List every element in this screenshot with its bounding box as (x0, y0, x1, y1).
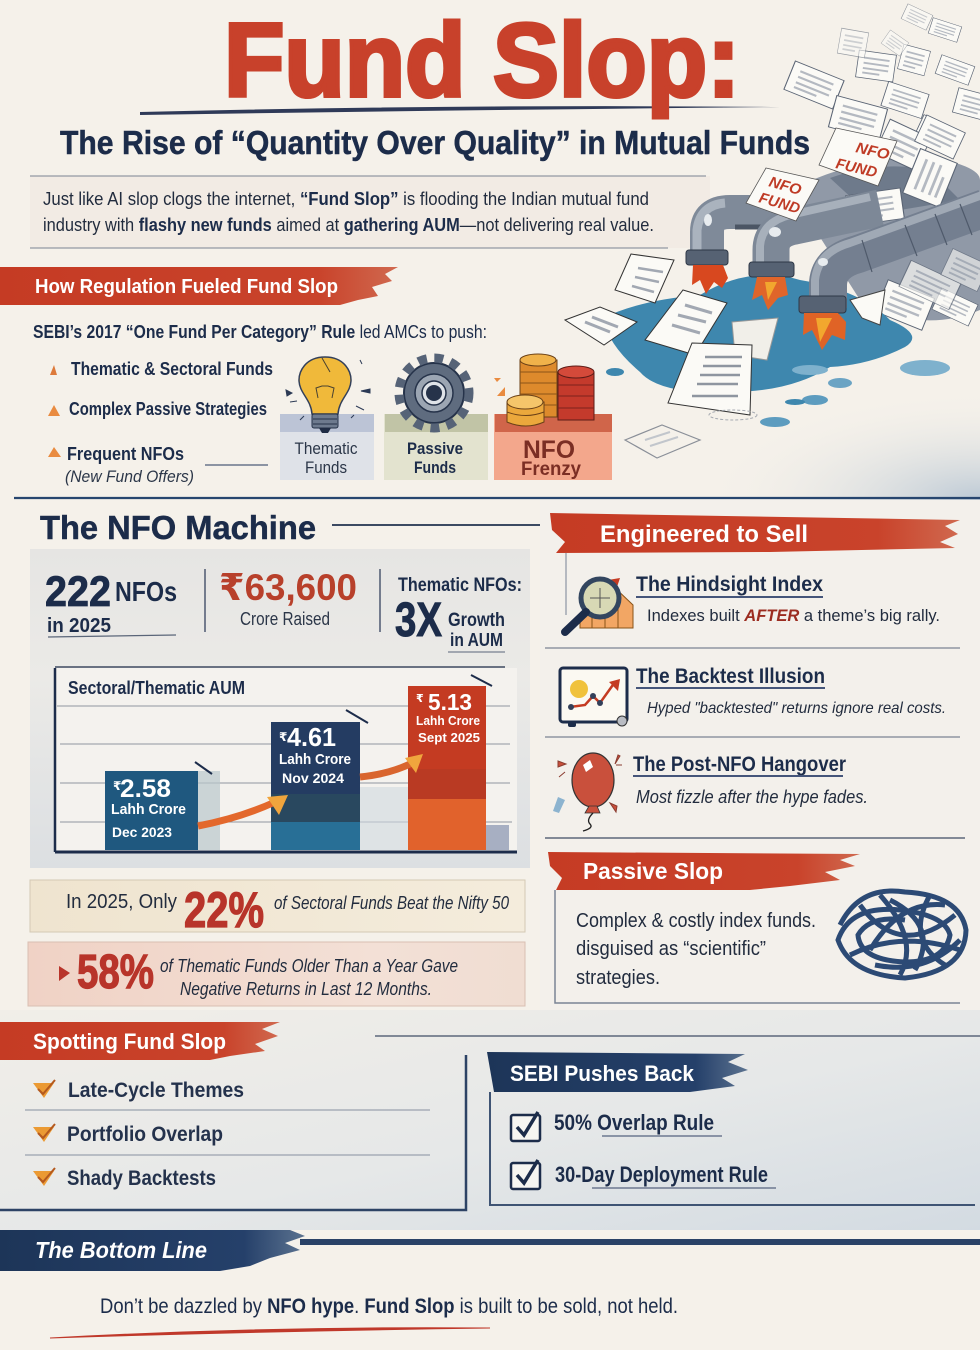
bar: Nov 2024: Nov 2024 (282, 770, 344, 786)
banner: How Regulation Fueled Fund Slop: How Regulation Fueled Fund Slop (35, 276, 338, 298)
box: Thematic Funds (280, 414, 374, 480)
bullet list: Complex Passive Strategies (69, 399, 267, 419)
heading: The NFO Machine: The NFO Machine (40, 509, 316, 546)
item: The Post-NFO Hangover (553, 753, 868, 831)
bullet list: Thematic & Sectoral Funds (71, 359, 273, 379)
arrow: 2023 to 2024 (198, 795, 288, 826)
banner: Engineered to Sell (550, 513, 960, 553)
bar: Nov 2024 (271, 710, 368, 850)
NFO FUND card (819, 128, 897, 186)
foreground papers (565, 254, 885, 458)
item: The Backtest Illusion: The Backtest Illusion (636, 665, 825, 688)
stat: thematic NFOs 3X: Thematic NFOs: (398, 575, 522, 596)
rule: 30-Day Deployment (511, 1160, 776, 1189)
divider (14, 497, 980, 499)
panel: NFO stats (30, 549, 530, 868)
bar: Nov 2024: ₹ (279, 730, 287, 744)
NFO FUND card (746, 168, 819, 221)
bar: Sept 2025 (408, 675, 492, 850)
heap of paper (790, 155, 980, 320)
banner: Passive Slop (548, 852, 860, 890)
icon: magnifying glass over chart (565, 578, 633, 632)
NFO FUND card: FUND (757, 190, 802, 217)
flying papers (784, 4, 980, 155)
box: Passive Funds (384, 414, 488, 480)
panel: Passive Slop: strategies. (576, 967, 660, 989)
illustration: pipes flooding paper (565, 4, 980, 458)
callout: 58 percent (28, 942, 525, 1006)
bar: Nov 2024: 4.61 (287, 722, 336, 752)
item: The Post-NFO Hangover: Most fizzle after the hype fades. (636, 787, 868, 807)
panel: Spotting Fund Slop (0, 1022, 980, 1210)
stat: rupee 63,600: Crore Raised (240, 609, 330, 629)
list item: Portfolio Overlap: Portfolio Overlap (67, 1123, 223, 1146)
bar: Dec 2023: ₹ (113, 779, 121, 793)
box: Passive Funds: Passive (407, 439, 463, 458)
stat: 222 NFOs: in 2025 (47, 615, 111, 637)
bar: Sept 2025: Lahh Crore (416, 713, 480, 728)
box: Passive Funds: Funds (414, 458, 456, 477)
banner: The Bottom Line: The Bottom Line (35, 1237, 207, 1263)
panel: Passive Slop: Complex & costly index funds. (576, 910, 816, 932)
bar: Sept 2025: 5.13 (428, 689, 472, 715)
item: The Hindsight Index: Indexes built AFTER a theme’s big rally. (647, 606, 940, 625)
bar: Nov 2024: Lahh Crore (279, 751, 351, 768)
box: NFO Frenzy: Frenzy (521, 459, 581, 480)
bar: Sept 2025: ₹ (416, 693, 424, 705)
item: The Post-NFO Hangover: The Post-NFO Hangover (633, 753, 846, 776)
stat: thematic NFOs 3X: 3X (395, 594, 442, 647)
box: Thematic Funds: Thematic (294, 439, 358, 458)
stat: rupee 63,600 (219, 567, 357, 629)
callout: 22 percent (30, 880, 525, 938)
item: The Hindsight Index (565, 573, 940, 632)
icon: balloon (553, 753, 622, 831)
icon: coin stacks (494, 354, 594, 426)
bar: Sept 2025: Sept 2025 (418, 730, 480, 745)
box: Thematic Funds: Funds (305, 458, 347, 477)
banner: Engineered to Sell: Engineered to Sell (600, 521, 808, 548)
callout: 22 percent: 22% (184, 882, 264, 938)
subtitle: The Rise of “Quantity Over Quality” in Mutual Funds (60, 124, 810, 161)
icon: gear (399, 358, 469, 428)
callout: 58 percent: of Thematic Funds Older Than a Year Gave (160, 956, 458, 976)
callout: 58 percent: 58% (77, 946, 154, 999)
list item: Shady Backtests: Shady Backtests (67, 1167, 216, 1190)
NFO FUND card: NFO (767, 174, 804, 199)
panel: Spotting Fund Slop: Spotting Fund Slop (33, 1029, 226, 1054)
panel: SEBI Pushes Back: SEBI Pushes Back (510, 1061, 695, 1086)
icon: tangled scribble (838, 891, 966, 978)
stat: 222 NFOs: NFOs (115, 576, 177, 607)
intro paragraph: Just like AI slop clogs the internet, “Fund Slop” is flooding the Indian mutual fund (43, 189, 649, 209)
chart title: Sectoral/Thematic AUM (68, 678, 245, 698)
callout: 22 percent: of Sectoral Funds Beat the Nifty 50 (274, 893, 509, 913)
panel: Passive Slop (555, 890, 966, 1003)
banner: How Regulation Fueled Fund Slop (0, 267, 398, 305)
bar: Dec 2023 (105, 762, 212, 850)
stat: 222 NFOs: 222 (45, 568, 111, 616)
panel: Passive Slop: disguised as “scientific” (576, 938, 766, 960)
conclusion text: Don’t be dazzled by NFO hype. Fund Slop is built to be sold, not held. (100, 1295, 678, 1318)
box: NFO Frenzy (494, 414, 612, 480)
rule: 50% Overlap: 50% Overlap Rule (554, 1110, 714, 1135)
conclusion text (50, 1295, 678, 1338)
red flames (692, 265, 728, 294)
bar: Dec 2023: Lahh Crore (111, 801, 186, 818)
rule: 30-Day Deployment: 30-Day Deployment Rule (555, 1162, 768, 1187)
bar: Dec 2023: Dec 2023 (112, 824, 172, 840)
item: The Hindsight Index: The Hindsight Index (636, 573, 823, 596)
sebi rule line: SEBI’s 2017 “One Fund Per Category” Rule led AMCs to push: (33, 322, 487, 342)
icon: light bulb (286, 357, 370, 433)
stat: thematic NFOs 3X (395, 575, 522, 652)
intro paragraph: industry with flashy new funds aimed at gathering AUM—not delivering real value. (43, 215, 654, 235)
callout: 58 percent: Negative Returns in Last 12 Months. (180, 979, 432, 999)
bar: Dec 2023: 2.58 (120, 775, 171, 803)
box: NFO Frenzy: NFO (523, 436, 575, 464)
stat: rupee 63,600: ₹63,600 (219, 567, 357, 608)
stat: thematic NFOs 3X: in AUM (450, 630, 503, 650)
arrow: 2024 to 2025 (360, 754, 423, 777)
pipes (707, 212, 780, 258)
banner: The Bottom Line (0, 1230, 980, 1271)
stat: 222 NFOs (45, 568, 177, 637)
intro paragraph (30, 176, 710, 248)
title: Fund Slop: (224, 3, 740, 119)
bullet list: Frequent NFOs (67, 444, 184, 464)
callout: 22 percent: In 2025, Only (66, 891, 177, 913)
list item: Late-Cycle Themes: Late-Cycle Themes (68, 1079, 244, 1102)
item: The Backtest Illusion: Hyped "backtested" returns ignore real costs. (647, 700, 946, 717)
banner: Passive Slop: Passive Slop (583, 858, 723, 884)
bullet list: (New Fund Offers) (65, 467, 194, 486)
stat: thematic NFOs 3X: Growth (448, 610, 505, 631)
bullet list (48, 359, 273, 486)
NFO FUND card: NFO (854, 139, 891, 164)
bar chart: Sectoral/Thematic AUM (55, 667, 517, 852)
NFO FUND card: FUND (834, 155, 879, 181)
puddle (603, 275, 912, 392)
item: The Backtest Illusion (560, 665, 946, 727)
rule: 50% Overlap (511, 1110, 722, 1141)
icon: backtest screen (560, 668, 627, 727)
panel: SEBI Pushes Back (487, 1052, 975, 1205)
